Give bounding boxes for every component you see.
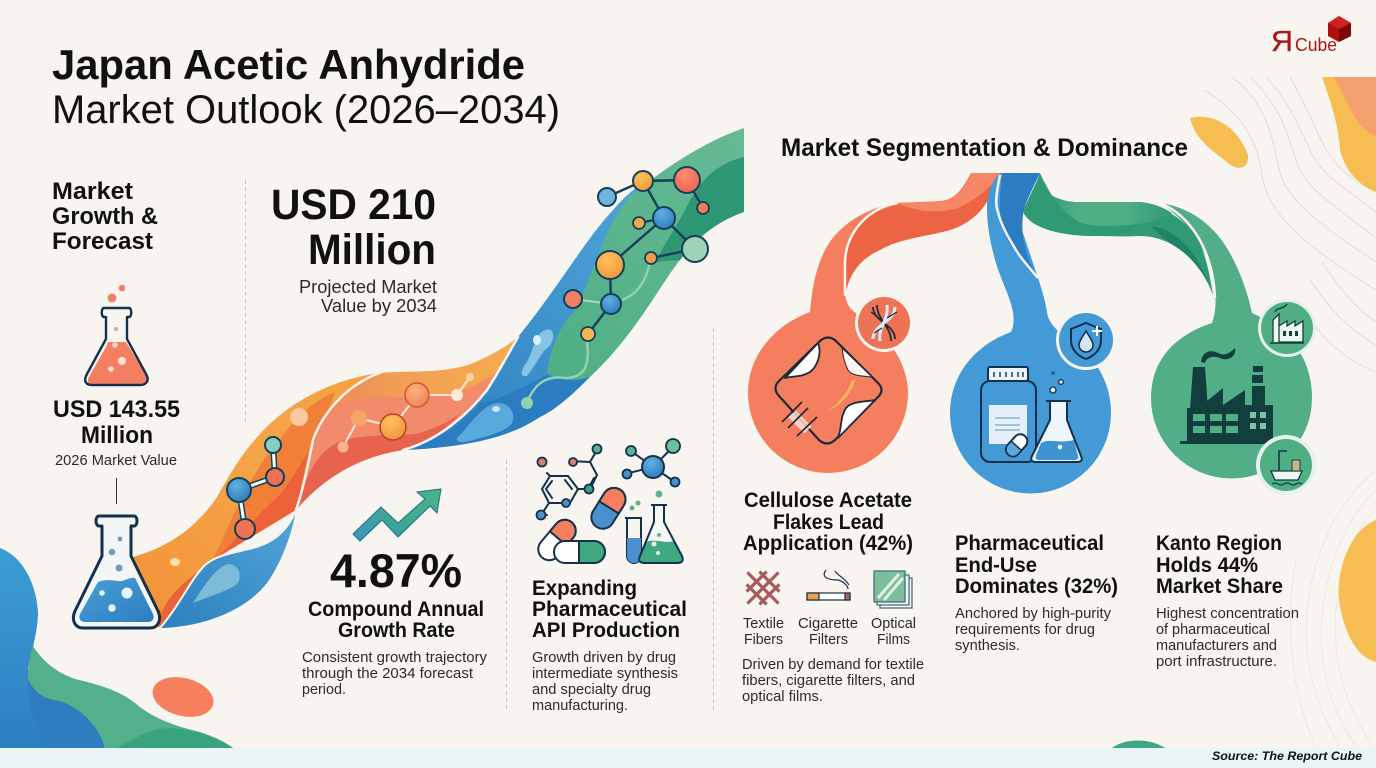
text: pharmaceutical description: Anchored by high-purity xyxy=(955,606,1112,622)
blob: bottom green accent xyxy=(1112,740,1165,748)
text: expanding pharmaceutical heading: Pharmaceutical xyxy=(532,598,687,621)
stat: USD 210 million: Projected Market xyxy=(299,277,437,297)
text: kanto description: port infrastructure. xyxy=(1156,654,1277,670)
text: kanto description xyxy=(1156,606,1299,670)
ribbon: growth flow xyxy=(133,128,744,628)
heading: market segmentation: Market Segmentation & Dominance xyxy=(781,134,1188,162)
heading: pharmaceutical end-use: Dominates (32%) xyxy=(955,575,1118,598)
icon: factory xyxy=(1180,348,1275,444)
stat: USD 143.55 million: 2026 Market Value xyxy=(55,453,177,469)
heading: market growth and forecast: Market xyxy=(52,178,133,205)
stat: USD 210 million: Value by 2034 xyxy=(321,296,437,316)
heading: pharmaceutical end-use: Pharmaceutical xyxy=(955,532,1104,555)
text: expanding pharmaceutical description: and specialty drug xyxy=(532,682,651,698)
heading: kanto region: Holds 44% xyxy=(1156,554,1258,577)
label: cigarette filters: Cigarette xyxy=(798,616,858,632)
title: Japan Acetic Anhydride xyxy=(52,41,525,88)
text: expanding pharmaceutical description: intermediate synthesis xyxy=(532,666,678,682)
icon: coral flask xyxy=(85,285,148,385)
icon: cigarette xyxy=(807,570,850,600)
text: pharmaceutical description xyxy=(955,606,1112,654)
icon: textile fibers xyxy=(747,572,779,604)
text: cellulose description: optical films. xyxy=(742,689,823,705)
heading: pharmaceutical end-use: End-Use xyxy=(955,554,1037,577)
icon: DNA badge xyxy=(855,294,913,352)
logo: Cube xyxy=(1295,35,1337,55)
icon: pharmaceutical API xyxy=(534,439,683,565)
label: cigarette filters: Filters xyxy=(809,632,848,648)
logo: Я xyxy=(1271,26,1293,58)
icon: blue flask xyxy=(73,516,160,628)
blob: top right orange and yellow xyxy=(1322,77,1376,192)
text: CAGR description: Consistent growth trajectory xyxy=(302,650,488,666)
label: textile fibers: Fibers xyxy=(744,632,783,648)
text: kanto description: of pharmaceutical xyxy=(1156,622,1270,638)
stat: USD 210 million: USD 210 xyxy=(271,181,436,229)
stat: CAGR 4.87%: 4.87% xyxy=(330,544,462,597)
heading: kanto region xyxy=(1156,532,1283,598)
title: Market Outlook (2026–2034) xyxy=(52,88,560,132)
stat: CAGR 4.87%: Compound Annual xyxy=(308,598,484,621)
stat: USD 143.55 million xyxy=(53,396,180,469)
text: expanding pharmaceutical heading: API Production xyxy=(532,619,680,642)
molecule: upper ribbon xyxy=(564,167,709,341)
text: expanding pharmaceutical description: manufacturing. xyxy=(532,698,628,714)
divider: right xyxy=(712,328,714,710)
text: cellulose description: fibers, cigarette filters, and xyxy=(742,673,915,689)
text: kanto description: Highest concentration xyxy=(1156,606,1299,622)
stat: USD 143.55 million: USD 143.55 xyxy=(53,396,180,423)
blob: small yellow accent xyxy=(1190,117,1248,168)
icon: growth arrow xyxy=(353,489,441,541)
blob: coral ellipse xyxy=(148,671,218,723)
icon: mini ship badge xyxy=(1256,435,1316,495)
stat: USD 143.55 million: Million xyxy=(81,422,153,449)
text: cellulose description xyxy=(742,657,924,705)
text: expanding pharmaceutical description: Growth driven by drug xyxy=(532,650,676,666)
blob: right yellow xyxy=(1339,520,1376,662)
text: kanto description: manufacturers and xyxy=(1156,638,1277,654)
text: pharmaceutical description: synthesis. xyxy=(955,638,1020,654)
connector line xyxy=(116,478,118,504)
text: CAGR description: through the 2034 forecast xyxy=(302,666,473,682)
icon: bottle and flask xyxy=(981,367,1082,462)
label: cigarette filters xyxy=(798,616,858,648)
text: expanding pharmaceutical heading: Expanding xyxy=(532,577,637,600)
icon: optical films xyxy=(874,571,912,608)
stat: USD 210 million: Million xyxy=(308,226,436,274)
heading: pharmaceutical end-use xyxy=(955,532,1118,598)
heading: cellulose acetate xyxy=(743,489,913,555)
decorative contour lines xyxy=(1204,77,1376,745)
text: expanding pharmaceutical description xyxy=(532,650,678,714)
panel: blue flow and bubble xyxy=(950,173,1111,494)
molecule: lower ribbon xyxy=(227,437,284,539)
icon: shield badge xyxy=(1056,310,1116,370)
stat: USD 210 million xyxy=(271,181,437,316)
text: cellulose description: Driven by demand for textile xyxy=(742,657,924,673)
panel: coral flow and bubble xyxy=(748,173,1000,473)
heading: market growth and forecast: Forecast xyxy=(52,228,153,255)
footer strip xyxy=(0,748,1376,768)
divider: left xyxy=(244,180,246,422)
heading: cellulose acetate: Application (42%) xyxy=(743,532,913,555)
text: pharmaceutical description: requirements for drug xyxy=(955,622,1095,638)
blob: bottom left blue and green xyxy=(0,548,233,748)
label: textile fibers: Textile xyxy=(743,616,784,632)
text: CAGR description: period. xyxy=(302,682,346,698)
heading: market growth and forecast xyxy=(52,178,158,255)
panel: green flow and bubble xyxy=(1023,173,1312,478)
label: textile fibers xyxy=(743,616,784,648)
logo xyxy=(1271,16,1351,58)
label: optical films xyxy=(871,616,916,648)
title xyxy=(52,41,560,132)
label: optical films: Films xyxy=(877,632,910,648)
divider: middle xyxy=(506,460,508,710)
label: optical films: Optical xyxy=(871,616,916,632)
heading: cellulose acetate: Cellulose Acetate xyxy=(744,489,912,512)
source note: Source: The Report Cube xyxy=(1212,749,1362,763)
stat: CAGR 4.87%: Growth Rate xyxy=(338,619,455,642)
molecule: middle ribbon xyxy=(338,373,474,452)
text: expanding pharmaceutical heading xyxy=(532,577,687,642)
icon: cellulose flake xyxy=(776,338,882,444)
heading: market growth and forecast: Growth & xyxy=(52,203,158,230)
icon: mini factory badge xyxy=(1258,299,1316,357)
heading: cellulose acetate: Flakes Lead xyxy=(773,511,884,534)
text: CAGR description xyxy=(302,650,488,698)
stat: CAGR 4.87% xyxy=(308,544,484,642)
heading: kanto region: Market Share xyxy=(1156,575,1283,598)
heading: kanto region: Kanto Region xyxy=(1156,532,1282,555)
